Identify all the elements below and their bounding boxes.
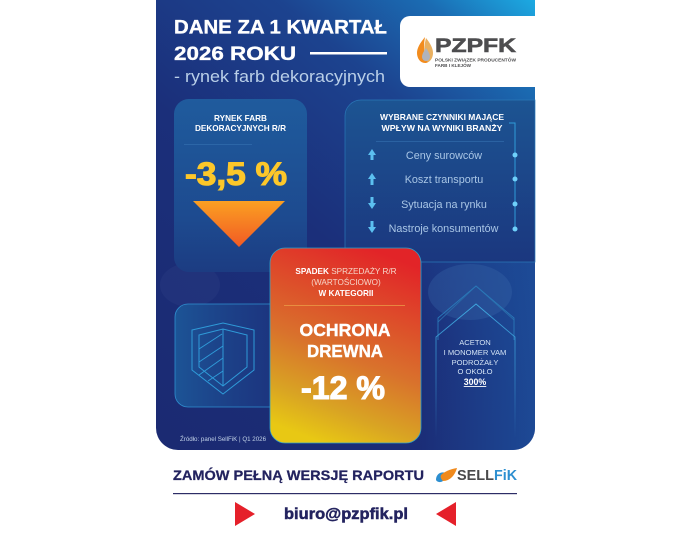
text block: I MONOMER VAM — [444, 348, 506, 357]
panel heading: RYNEK FARB — [214, 114, 267, 123]
panel heading: WPŁYW NA WYNIKI BRANŻY — [382, 123, 503, 133]
text block: 300% — [464, 377, 486, 387]
panel: category drop — [270, 248, 421, 443]
logo box: PZPFK: POLSKI ZWIĄZEK PRODUCENTÓW — [435, 56, 517, 62]
timeline rail — [509, 123, 518, 232]
source note: Źródło: panel SellFiK | Q1 2026 — [180, 436, 267, 443]
icon: flame logo — [417, 37, 433, 63]
panel heading: DEKORACYJNYCH R/R — [195, 124, 286, 133]
text block — [444, 338, 506, 387]
text block: O OKOŁO — [457, 367, 493, 376]
logo box: PZPFK: FARB I KLEJÓW — [435, 61, 472, 68]
panel heading — [195, 114, 286, 133]
icon: down triangle — [193, 201, 285, 247]
logo box: PZPFK — [400, 16, 535, 87]
title: 2026 ROKU — [174, 43, 296, 65]
category name: OCHRONA — [300, 320, 391, 340]
icon: house chevrons — [436, 286, 515, 438]
icon: SellFiK flame — [436, 468, 457, 482]
factor rows: Sytuacja na rynku — [401, 199, 487, 211]
logo: SellFiK: FiK — [494, 468, 518, 484]
title — [174, 16, 387, 86]
logo box: PZPFK: PZPFK — [435, 36, 516, 57]
factor rows: Koszt transportu — [405, 174, 483, 186]
panel: shield icon — [175, 304, 285, 407]
factor rows: Ceny surowców — [406, 150, 482, 162]
icons: direction arrows — [368, 149, 376, 233]
call to action: ZAMÓW PEŁNĄ WERSJĘ RAPORTU — [173, 466, 424, 483]
title: DANE ZA 1 KWARTAŁ — [174, 16, 387, 38]
panel heading — [380, 113, 505, 133]
icon: left red arrow — [436, 502, 456, 526]
panel: factors — [345, 100, 535, 262]
text block: PODROŻAŁY — [452, 358, 498, 367]
panel: market change — [174, 99, 307, 272]
text block: ACETON — [459, 338, 491, 347]
category name: DREWNA — [307, 341, 383, 361]
panel heading: W KATEGORII — [319, 289, 373, 298]
value: -3,5 % — [185, 156, 287, 192]
panel heading: WYBRANE CZYNNIKI MAJĄCE — [380, 113, 505, 122]
poster background — [156, 0, 535, 450]
factor rows: Nastroje konsumentów — [389, 223, 499, 235]
icon: shield — [192, 323, 254, 394]
title: - rynek farb dekoracyjnych — [174, 68, 385, 86]
category name — [300, 320, 391, 361]
value: -12 % — [301, 370, 385, 406]
icon: right red arrow — [235, 502, 255, 526]
logo: SellFiK: SELL — [457, 468, 494, 484]
logo: SellFiK — [436, 468, 518, 484]
panel heading: SPADEK SPRZEDAŻY R/R — [295, 266, 397, 276]
divider — [173, 493, 517, 494]
panel heading: (WARTOŚCIOWO) — [311, 276, 381, 287]
panel heading — [295, 266, 397, 298]
factor rows — [389, 150, 499, 235]
email: biuro@pzpfik.pl — [284, 506, 408, 523]
panel: raw material prices — [436, 286, 515, 438]
